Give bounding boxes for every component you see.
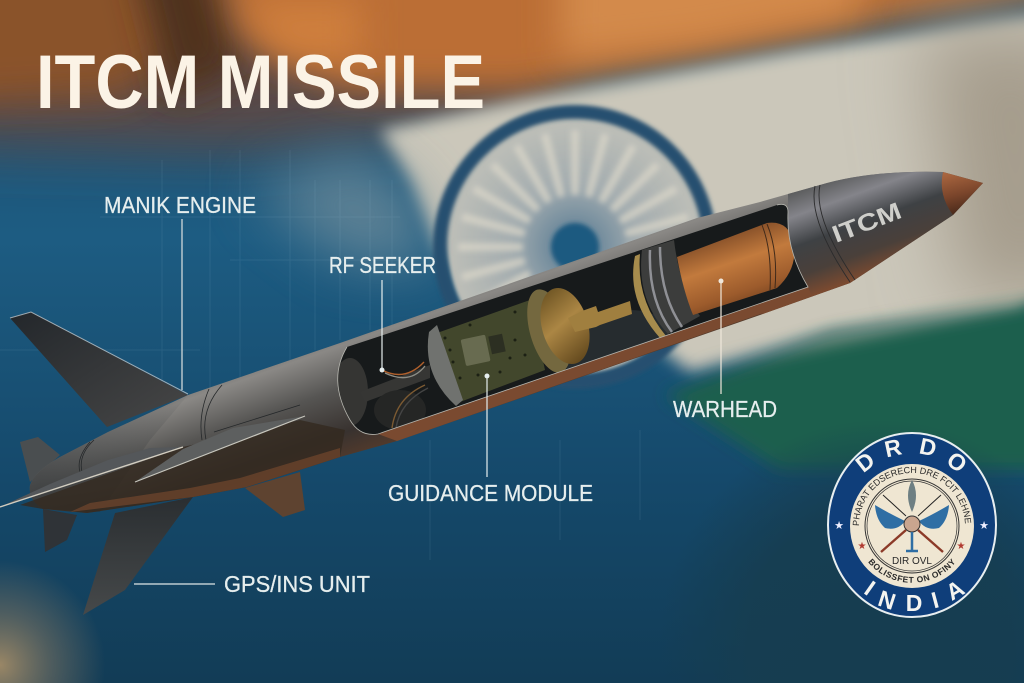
seal: lettering <box>850 433 972 616</box>
logo: DRDO seal: ★ <box>979 520 989 532</box>
flag: teal lower right <box>650 420 1024 683</box>
seal: lettering: N <box>875 585 899 615</box>
seal: lettering: O <box>942 446 972 478</box>
wiring <box>382 362 428 428</box>
logo: DRDO seal: DIR OVL <box>892 556 932 567</box>
rear upper wing <box>10 312 188 427</box>
logo: DRDO seal: BOLISSFET ON OFINY <box>868 558 954 583</box>
seal: inner ring text <box>859 473 965 526</box>
callout: RF seeker <box>329 252 436 372</box>
seal: torch and emblem <box>908 480 916 512</box>
callout: warhead: WARHEAD <box>673 396 777 422</box>
callout: warhead <box>673 278 777 422</box>
seal: lettering: D <box>906 590 922 616</box>
callout: RF seeker: RF SEEKER <box>329 252 436 278</box>
nose ring lines <box>814 185 855 282</box>
side wing <box>135 416 305 482</box>
callout: Manik engine: MANIK ENGINE <box>104 192 256 218</box>
belly shadow under wings <box>20 420 345 513</box>
brass coupling <box>527 289 568 372</box>
missile <box>0 172 983 615</box>
flag: saffron band <box>0 0 1024 150</box>
tail fin lower <box>43 509 77 552</box>
seal: stars: ★ <box>834 520 844 532</box>
logo: DRDO seal: ★ <box>858 541 867 552</box>
title: ITCM MISSILE <box>36 40 485 125</box>
fuselage <box>30 172 983 513</box>
seal: lettering: D <box>917 433 939 461</box>
callout: guidance module: GUIDANCE MODULE <box>388 480 593 506</box>
seal: lettering: R <box>882 433 904 462</box>
rear wing blade <box>0 447 183 507</box>
seal: lettering: I <box>860 576 880 600</box>
icon: Ashoka chakra <box>440 112 710 382</box>
callout: GPS/INS unit: GPS/INS UNIT <box>224 571 370 597</box>
fuselage rear shading <box>30 395 188 512</box>
belly warm edge <box>70 448 340 512</box>
seal: wings <box>875 505 905 529</box>
belly fin <box>245 472 305 517</box>
nose cone tip <box>942 172 983 215</box>
bay outline <box>338 204 808 434</box>
rear lower wing <box>83 497 193 615</box>
seal: lettering: D <box>850 447 880 477</box>
flag: white edge over chakra <box>690 296 1024 372</box>
warm glow lower left <box>0 550 110 683</box>
warhead cylinder <box>677 223 794 315</box>
flag: white band <box>250 8 1024 372</box>
copper lower edge <box>378 287 812 441</box>
flag: green band <box>665 292 1024 470</box>
guidance module <box>437 300 545 402</box>
tail fin upper <box>20 437 60 482</box>
fuselage panel lines <box>79 385 300 472</box>
seal: lettering: A <box>941 575 969 605</box>
logo: DRDO seal <box>827 432 997 618</box>
nose label: ITCM <box>828 198 905 249</box>
logo: DRDO seal: PHARAT EDSERECH DRE FCIT LEHNE <box>852 466 972 526</box>
seal: lettering: I <box>929 587 941 613</box>
logo: DRDO seal: ★ <box>957 541 966 552</box>
grid lines <box>0 150 640 560</box>
nose section <box>760 172 953 315</box>
seal: crossed rifles <box>883 495 941 516</box>
callout: guidance module <box>388 374 593 506</box>
warhead rings <box>641 240 700 334</box>
internal bay <box>338 204 808 434</box>
